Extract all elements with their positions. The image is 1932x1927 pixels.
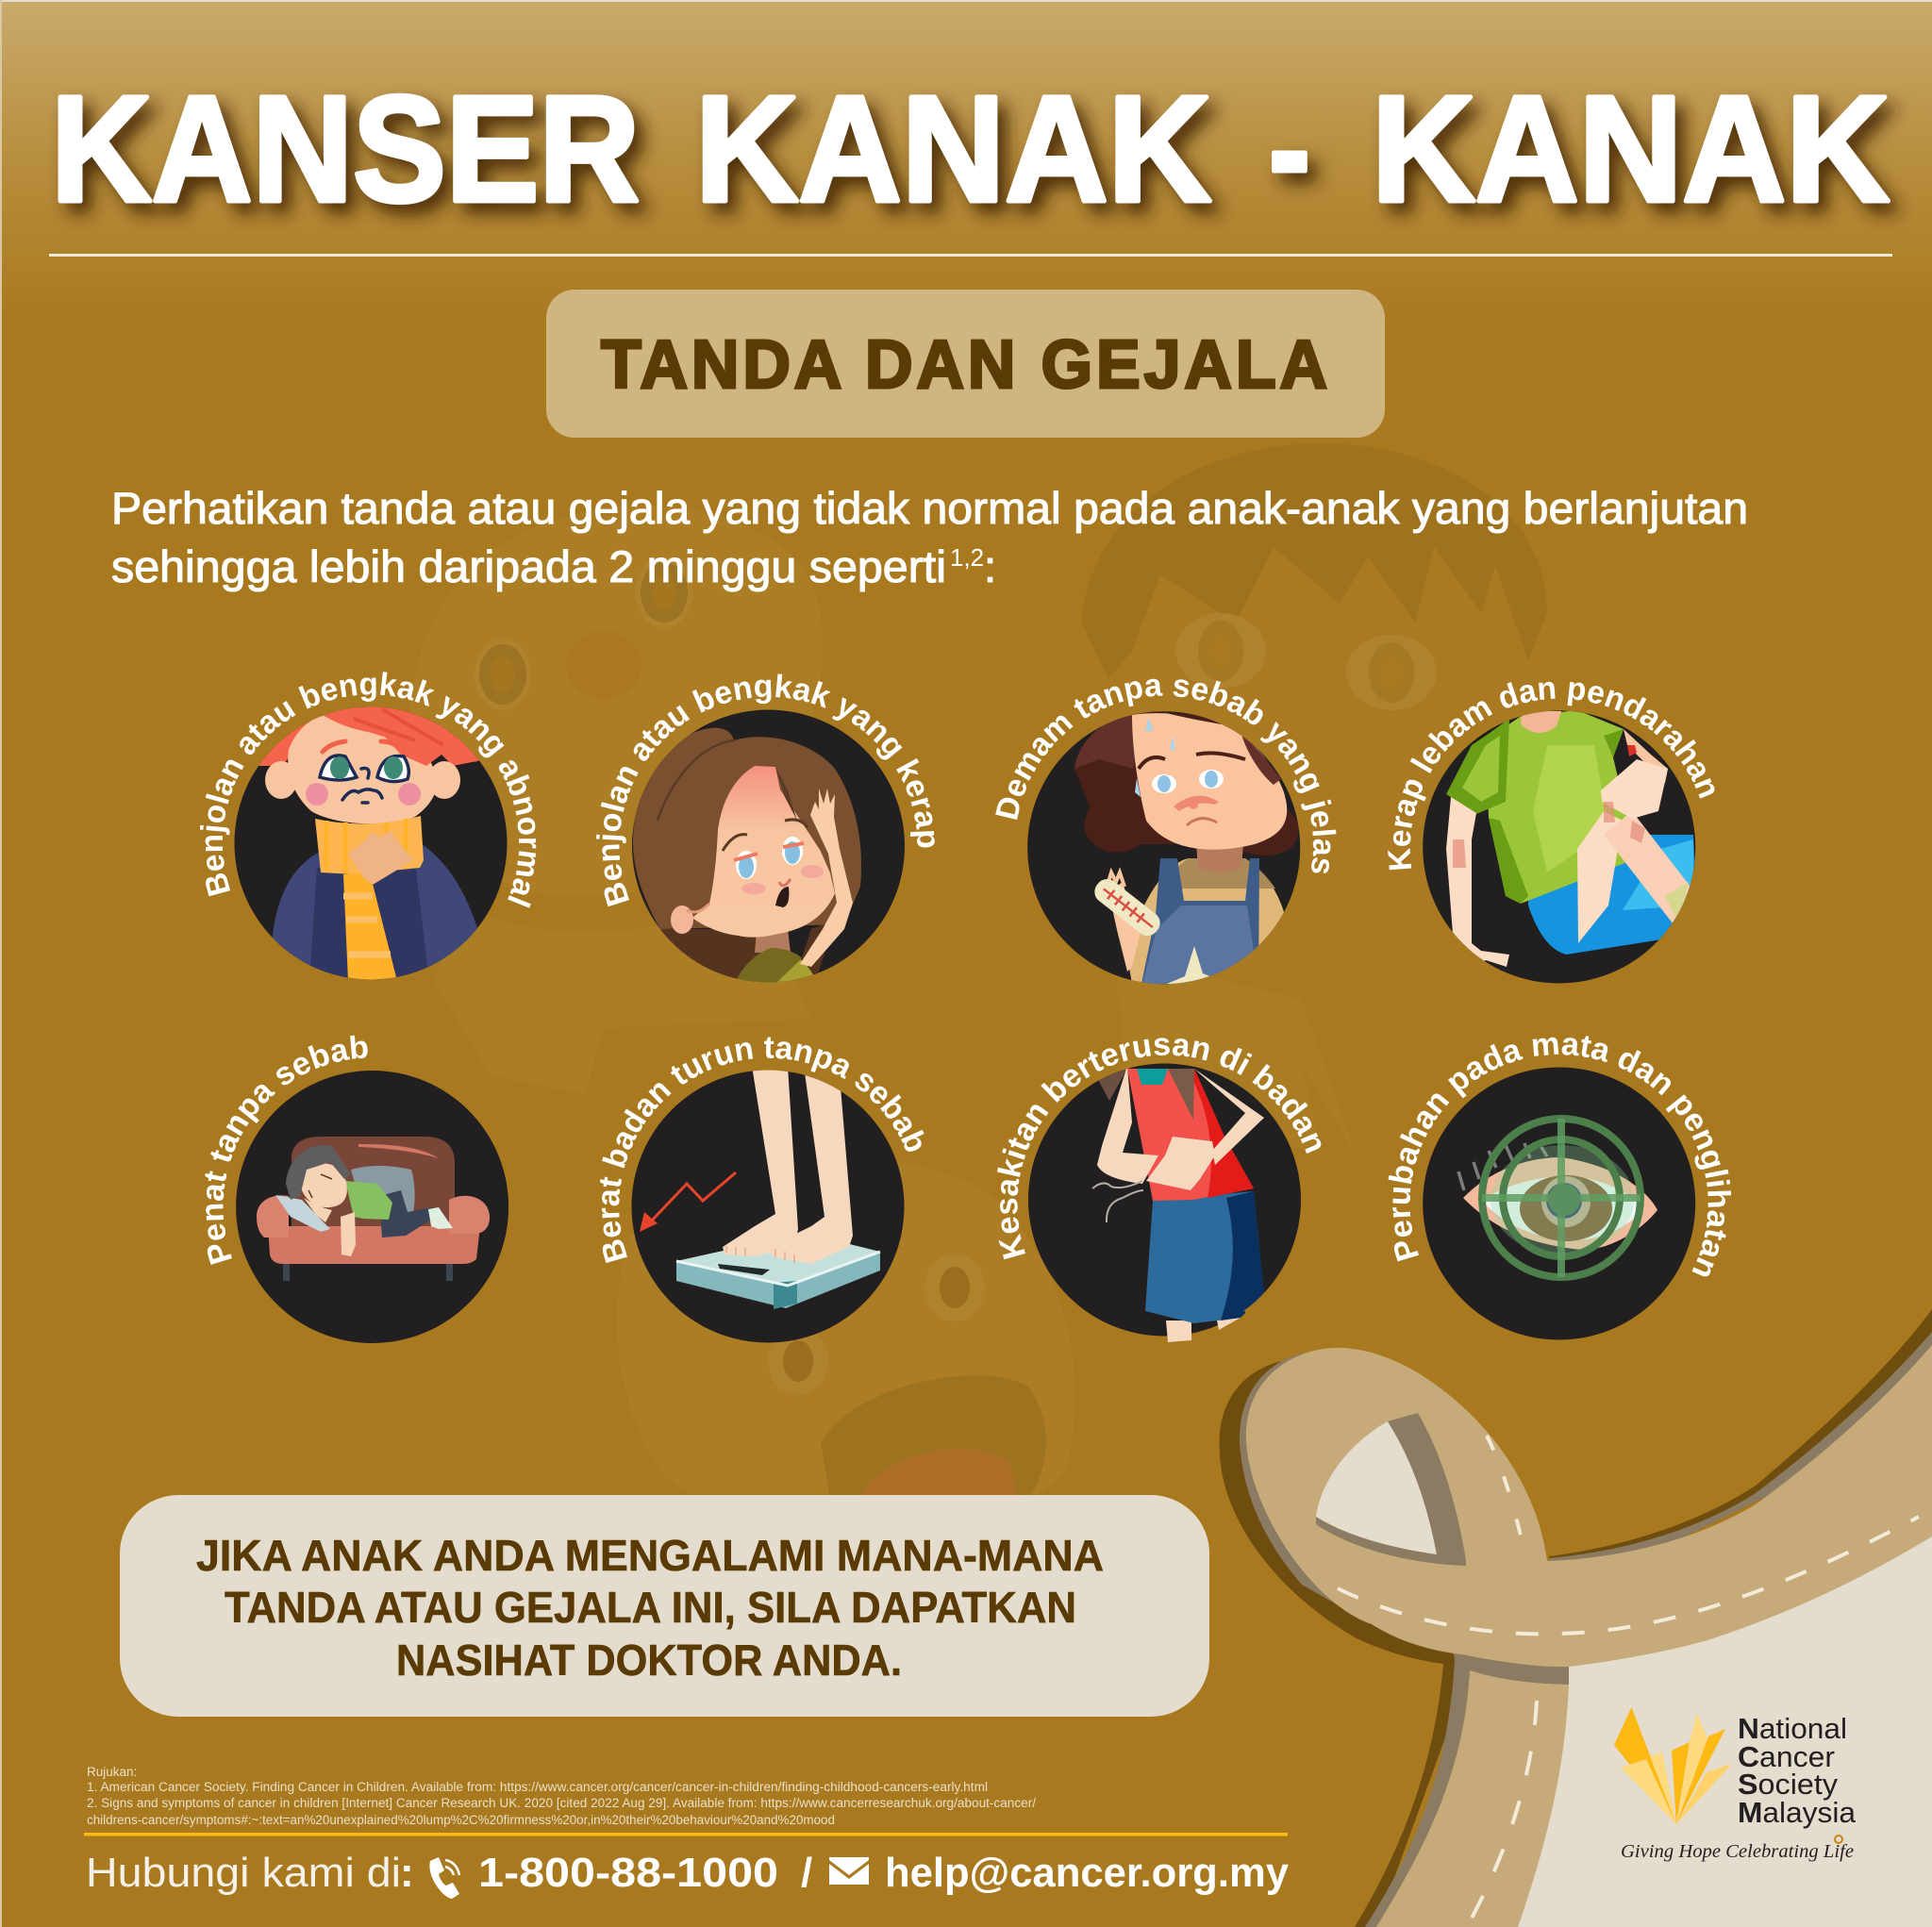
symptom 2: headache, girl xyxy=(632,709,905,986)
references: Rujukan: xyxy=(87,1765,137,1779)
label 6: Berat badan turun tanpa sebab xyxy=(600,1038,924,1263)
callout: NASIHAT DOKTOR ANDA. xyxy=(396,1636,902,1685)
ghost watermark: screaming child xyxy=(617,1155,1075,1528)
title: KANAK xyxy=(695,64,1211,233)
logo xyxy=(1614,1707,1857,1862)
contact line: 1-800-88-1000 xyxy=(478,1850,778,1896)
intro text xyxy=(111,483,1748,591)
title: KANSER xyxy=(51,64,640,233)
label 8: Perubahan pada mata dan penglihatan xyxy=(1389,1036,1732,1277)
cream corner xyxy=(1472,1533,1932,1927)
heading pill xyxy=(546,290,1385,438)
logo: National xyxy=(1738,1712,1847,1745)
callout: JIKA ANAK ANDA MENGALAMI MANA-MANA xyxy=(196,1531,1104,1580)
title: - xyxy=(1269,64,1310,233)
title xyxy=(51,64,1890,233)
contact line: Hubungi kami di xyxy=(86,1850,401,1896)
label 1: Benjolan atau bengkak yang abnormal xyxy=(200,672,536,908)
symptom 5: tired, boy on sofa xyxy=(236,1071,508,1343)
symptom 3: fever, girl with thermometer xyxy=(1027,709,1300,986)
icon: envelope xyxy=(829,1857,869,1885)
intro text: 1,2 xyxy=(950,543,984,572)
label 3: Demam tanpa sebab yang jelas xyxy=(995,679,1336,873)
label 5: Penat tanpa sebab xyxy=(205,1036,368,1265)
icon: phone xyxy=(429,1857,459,1899)
contact line xyxy=(86,1850,1290,1899)
callout: TANDA ATAU GEJALA INI, SILA DAPATKAN xyxy=(225,1583,1076,1632)
references: 1. American Cancer Society. Finding Cancer in Children. Available from: https://www.cancer.org/cancer/cancer-in-children/finding-childhood-cancers-early.html xyxy=(87,1780,988,1794)
ghost watermark: girl face xyxy=(1081,443,1552,1160)
title: KANAK xyxy=(1372,64,1890,233)
intro text: : xyxy=(984,541,996,591)
logo: Malaysia xyxy=(1738,1796,1857,1829)
references xyxy=(87,1765,1036,1827)
heading pill: TANDA DAN GEJALA xyxy=(601,327,1331,403)
label 4: Kerap lebam dan pendarahan xyxy=(1388,681,1715,870)
references: childrens-cancer/symptoms#:~:text=an%20unexplained%20lump%2C%20firmness%20or,in%20their%20behaviour%20and%20mood xyxy=(87,1813,835,1827)
ribbon road xyxy=(1220,1309,1932,1927)
contact line: / xyxy=(801,1850,812,1896)
symptom 4: bruises, boy in green shirt xyxy=(1423,710,1698,983)
label 7: Kesakitan berterusan di badan xyxy=(996,1038,1321,1260)
intro text: Perhatikan tanda atau gejala yang tidak normal pada anak-anak yang berlanjutan xyxy=(111,483,1748,533)
contact line: : xyxy=(400,1850,414,1896)
symptom 7: persistent pain, girl holding stomach xyxy=(1028,1064,1301,1342)
intro text: sehingga lebih daripada 2 minggu seperti xyxy=(111,541,946,591)
label 2: Benjolan atau bengkak yang kerap xyxy=(596,673,935,907)
symptom 6: weight loss, feet on scale xyxy=(632,1066,904,1343)
callout xyxy=(120,1495,1209,1717)
logo: Giving Hope Celebrating Life xyxy=(1621,1841,1854,1862)
contact line: help@cancer.org.my xyxy=(885,1850,1290,1896)
symptom 8: eye changes, eye in target xyxy=(1423,1068,1695,1339)
logo: Cancer xyxy=(1738,1740,1835,1773)
logo: Society xyxy=(1738,1768,1839,1801)
symptom 1: lump, boy with scarf xyxy=(234,706,508,981)
ghost watermark: boy face xyxy=(409,506,824,1094)
references: 2. Signs and symptoms of cancer in children [Internet] Cancer Research UK. 2020 [cited 2022 Aug 29]. Available from: https://www.cancerresearchuk.org/about-cancer/ xyxy=(87,1796,1036,1810)
